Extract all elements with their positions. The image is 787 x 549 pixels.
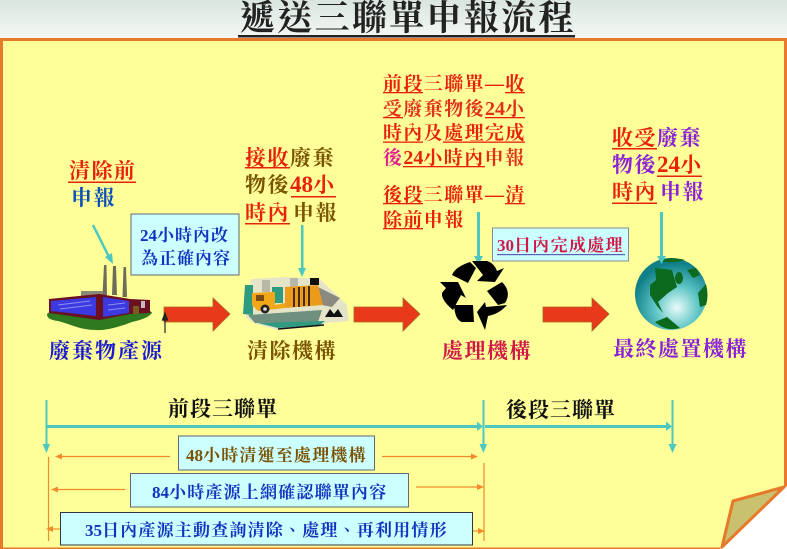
text: disposal declaration: 收受廢棄 bbox=[612, 126, 702, 150]
text: source declaration bbox=[68, 159, 136, 210]
timeline: stage brackets bbox=[42, 400, 676, 453]
bar: 48 hours: 48小時清運至處理機構 bbox=[186, 445, 367, 465]
text: treatment declaration: 後段三聯單—清 bbox=[383, 183, 526, 206]
callout: correct within 24 hours: 為正確內容 bbox=[141, 248, 231, 268]
heading: second-stage manifest: 後段三聯單 bbox=[506, 398, 616, 422]
callout: complete treatment within 30 days: 30日內完成處理 bbox=[497, 235, 624, 255]
bar: 48 hours bbox=[178, 436, 374, 470]
text: transporter declaration: 申報 bbox=[293, 201, 338, 225]
text: disposal declaration: 物後24小 bbox=[612, 152, 703, 177]
label: treatment facility: 處理機構 bbox=[442, 339, 532, 363]
callout: correct within 24 hours bbox=[131, 214, 239, 275]
text: treatment declaration bbox=[383, 73, 526, 231]
text: treatment declaration: 除前申報 bbox=[383, 208, 465, 231]
text: disposal declaration bbox=[612, 126, 705, 204]
arrow: source declaration to factory bbox=[93, 225, 113, 264]
callout: complete treatment within 30 days bbox=[492, 228, 628, 261]
text: transporter declaration: 物後48小 bbox=[245, 172, 336, 197]
text: transporter declaration: 接收廢棄 bbox=[245, 146, 335, 170]
icon: recycling symbol bbox=[440, 261, 508, 330]
title: 遞送三聯單申報流程 bbox=[240, 0, 576, 38]
icon: folded page corner bbox=[720, 486, 787, 549]
text: disposal declaration: 申報 bbox=[660, 180, 705, 204]
bar: 35 days: 35日內產源主動查詢清除、處理、再利用情形 bbox=[85, 520, 448, 540]
heading: first-stage manifest: 前段三聯單 bbox=[168, 397, 278, 421]
arrow: factory to transporter bbox=[162, 298, 230, 333]
label: waste generator: 廢棄物產源 bbox=[49, 339, 164, 363]
text: source declaration: 申報 bbox=[71, 186, 116, 210]
text: transporter declaration bbox=[245, 146, 338, 225]
timeline: orange guide lines bbox=[46, 454, 485, 541]
icon: globe bbox=[635, 258, 708, 330]
bar: 84 hours bbox=[130, 474, 408, 507]
arrow: transporter to treatment bbox=[354, 298, 420, 331]
text: transporter declaration: 時內 bbox=[245, 201, 290, 225]
label: transporter: 清除機構 bbox=[247, 339, 337, 363]
bar: 84 hours: 84小時產源上網確認聯單內容 bbox=[152, 482, 387, 502]
text: source declaration: 清除前 bbox=[69, 159, 136, 183]
arrow: treatment to disposal bbox=[543, 298, 609, 331]
icon: garbage truck bbox=[243, 277, 349, 330]
arrow: disposal declaration to globe bbox=[657, 212, 666, 264]
label: final disposal facility: 最終處置機構 bbox=[613, 337, 748, 361]
text: treatment declaration: 時內及處理完成 bbox=[383, 122, 526, 144]
arrow: treatment declaration to recycling bbox=[474, 212, 483, 265]
callout: correct within 24 hours: 24小時內改 bbox=[140, 226, 229, 245]
text: disposal declaration: 時內 bbox=[612, 180, 657, 204]
icon: factory bbox=[47, 265, 152, 330]
bar: 35 days bbox=[60, 512, 472, 545]
text: treatment declaration: 受廢棄物後24小 bbox=[383, 97, 526, 120]
arrow: transporter declaration to truck bbox=[298, 225, 306, 277]
text: treatment declaration: 後24小時內申報 bbox=[383, 146, 525, 169]
text: treatment declaration: 前段三聯單—收 bbox=[383, 73, 526, 95]
